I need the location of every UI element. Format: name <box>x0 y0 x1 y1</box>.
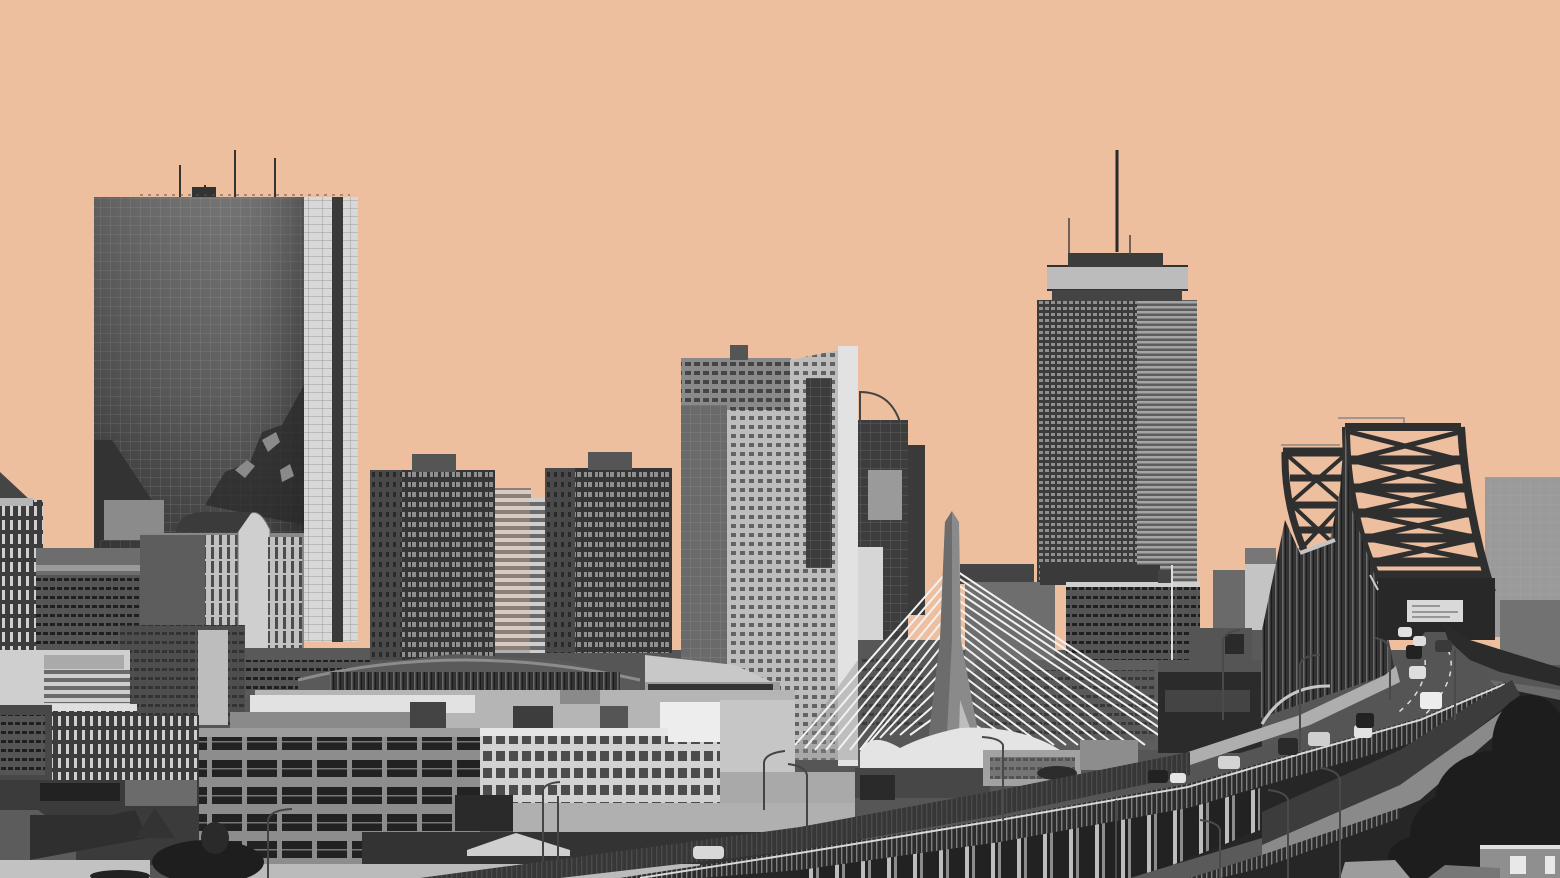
cars on the roadway <box>693 627 1452 859</box>
building: tall residential tower <box>681 345 858 766</box>
road: upper ramp surface with lane markings <box>1150 632 1490 820</box>
building: far-left tower with pitched roof <box>0 472 43 652</box>
building: dark mid-rise left <box>120 625 245 725</box>
bridge: concrete obelisk pylon <box>925 511 985 770</box>
building: white offices left <box>0 650 130 705</box>
bridge and road lamp posts <box>982 630 1455 878</box>
bridge: far truss tower <box>1281 418 1404 552</box>
road: upper deck concrete barrier <box>1100 666 1400 792</box>
road: right curving ramp wall <box>1442 622 1560 705</box>
sign: overhead toll panel <box>1407 600 1463 622</box>
building: long grey warehouse and brick base <box>200 803 862 878</box>
bridge: main truss tower <box>1345 427 1492 592</box>
midground buildings behind the cable-stayed bridge <box>795 640 1160 760</box>
road: dark fill beneath the viaduct <box>620 690 1560 878</box>
bridge: dark substructure by the truss <box>1158 628 1262 753</box>
arena and low-rise midground <box>245 648 795 790</box>
building: twin apartment towers <box>370 452 672 660</box>
building: Prudential-style tower <box>1037 150 1197 585</box>
building: large factory with window grid <box>199 712 480 865</box>
building: stepped mid-rise <box>36 548 178 650</box>
road: outer ramp <box>1130 680 1530 878</box>
building: gothic-style block <box>0 704 199 781</box>
building: block at foot of the tower <box>960 564 1200 740</box>
building: distant blocks beside the bridge <box>1190 548 1276 670</box>
white dome and low buildings at pylon base <box>855 728 1138 800</box>
building: dark crown tower <box>858 392 925 652</box>
building: glass tower left <box>94 150 358 647</box>
bridge: Zakim-style cables <box>795 572 1160 750</box>
trees: right foreground <box>1388 695 1560 878</box>
building: arched tower <box>140 512 304 651</box>
street lamps <box>268 751 807 878</box>
ground fill behind the city <box>0 650 1560 878</box>
bridge: dark gusset fan of the truss <box>1260 425 1495 724</box>
building: white office block <box>455 728 855 831</box>
tree: foreground left <box>0 822 264 878</box>
building: far-right glass block <box>1485 477 1560 665</box>
road: long upper deck noise wall <box>420 752 1190 878</box>
road: lower viaduct deck with railing <box>620 682 1514 878</box>
low dark rooftops left <box>0 780 200 865</box>
houses: bottom right <box>1340 845 1560 878</box>
